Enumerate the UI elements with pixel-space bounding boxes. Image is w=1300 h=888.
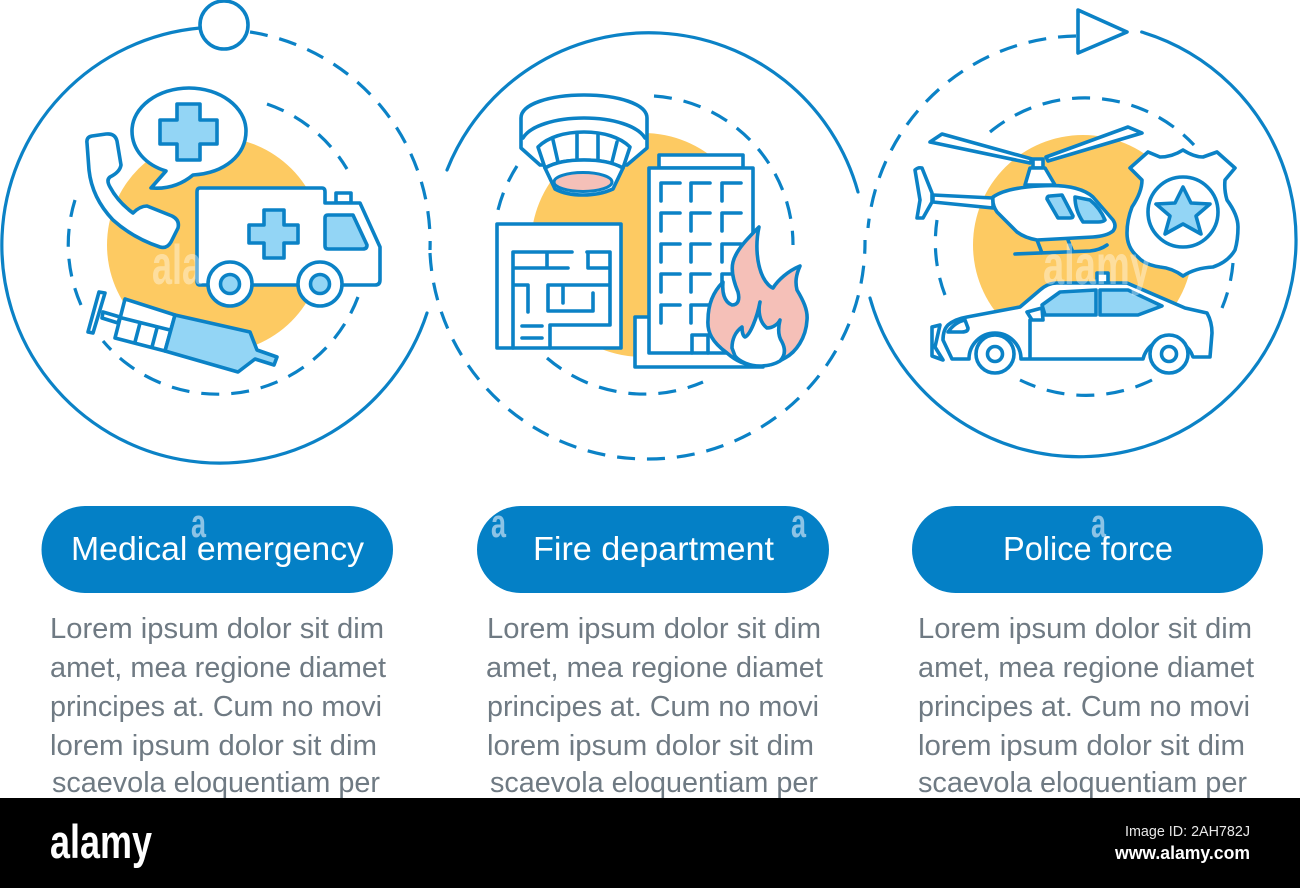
- heading pill: police force: [912, 502, 1263, 593]
- body text: fire department: scaevola eloquentiam per: [490, 767, 818, 799]
- heading pill: fire department: [477, 502, 829, 593]
- arrowhead marker: [1078, 10, 1127, 53]
- body text: medical emergency: principes at. Cum no movi: [50, 691, 382, 723]
- yellow circle: police: [973, 135, 1193, 355]
- body text: medical emergency: lorem ipsum dolor sit dim: [50, 730, 377, 762]
- panel: police force: [868, 10, 1296, 799]
- body text: police force: Lorem ipsum dolor sit dim: [918, 613, 1252, 645]
- heading pill: fire department: a: [791, 502, 807, 546]
- body text: fire department: [486, 613, 823, 799]
- body text: medical emergency: scaevola eloquentiam per: [52, 767, 380, 799]
- watermark text: ala: [152, 233, 203, 296]
- inner dashed ring: fire: [498, 96, 793, 394]
- icon: speech bubble with cross: [132, 88, 246, 188]
- body text: police force: scaevola eloquentiam per: [918, 767, 1247, 799]
- body text: fire department: principes at. Cum no movi: [487, 691, 819, 723]
- panel: fire department: [430, 33, 865, 799]
- icon: syringe: [88, 292, 277, 372]
- inner dashed ring: police: [935, 98, 1233, 395]
- heading pill: fire department: Fire department: [533, 530, 774, 567]
- heading pill: fire department: a: [491, 502, 507, 546]
- outer ring: fire: [430, 33, 865, 459]
- body text: fire department: lorem ipsum dolor sit dim: [487, 730, 814, 762]
- icon: helicopter: [915, 127, 1142, 254]
- watermark text: alamy: [1043, 233, 1151, 296]
- body text: police force: principes at. Cum no movi: [918, 691, 1250, 723]
- body text: medical emergency: amet, mea regione diamet: [50, 652, 386, 684]
- body text: medical emergency: [50, 613, 386, 799]
- outer ring: police: [868, 32, 1296, 457]
- icon: ambulance: [197, 188, 380, 306]
- icon: smoke detector: [521, 95, 647, 195]
- body text: fire department: amet, mea regione diamet: [486, 652, 823, 684]
- icon: floor plan: [497, 224, 621, 348]
- body text: police force: amet, mea regione diamet: [918, 652, 1254, 684]
- body text: fire department: Lorem ipsum dolor sit dim: [487, 613, 821, 645]
- footer bar: [0, 798, 1300, 888]
- icon: flame: [708, 227, 807, 366]
- heading pill: police force: a: [1091, 502, 1107, 546]
- heading pill: medical emergency: a: [191, 502, 207, 546]
- body text: medical emergency: Lorem ipsum dolor sit dim: [50, 613, 384, 645]
- heading pill: police force: Police force: [1003, 530, 1173, 567]
- outer ring: medical: [2, 28, 430, 463]
- inner dashed ring: medical: [68, 104, 358, 394]
- body text: police force: [918, 613, 1254, 799]
- icon: police badge: [1127, 150, 1238, 276]
- footer logo: alamy: [50, 815, 152, 868]
- heading pill: medical emergency: Medical emergency: [71, 530, 365, 567]
- icon: telephone handset: [87, 134, 178, 247]
- icon: police car: [932, 273, 1212, 373]
- image id: Image ID: 2AH782J: [1125, 823, 1250, 840]
- yellow circle: fire: [531, 133, 755, 357]
- start marker circle: [200, 1, 248, 49]
- website: www.alamy.com: [1114, 843, 1250, 863]
- yellow circle: medical: [107, 137, 323, 353]
- heading pill: medical emergency: [42, 502, 393, 593]
- icon: burning building: [635, 155, 807, 367]
- panel: medical emergency: [2, 1, 430, 799]
- body text: police force: lorem ipsum dolor sit dim: [918, 730, 1245, 762]
- watermark text: [152, 233, 1151, 296]
